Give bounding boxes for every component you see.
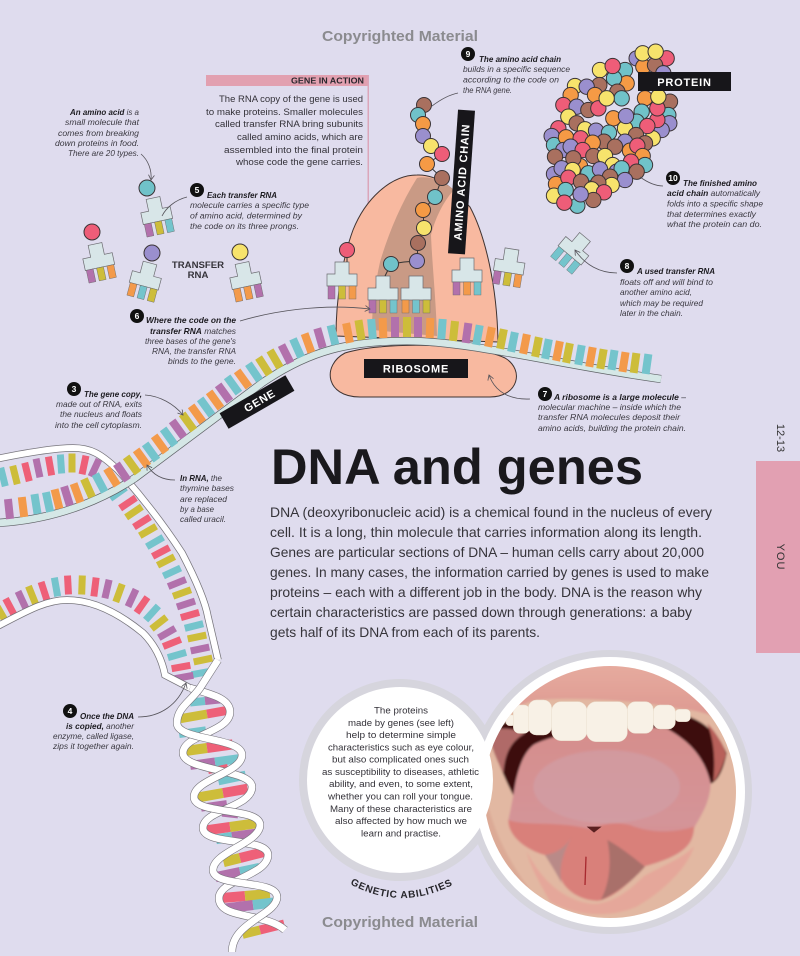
callout: uracil (147, 465, 234, 524)
callout: uracil: are replaced (180, 494, 227, 504)
gene in action panel (206, 75, 369, 232)
callout 10: finished chain: 10 (668, 173, 678, 183)
callout 7: ribosome: 7 (543, 389, 548, 399)
ribosome large subunit (336, 175, 498, 342)
callout 8: used transfer RNA: another amino acid, (620, 287, 692, 297)
genetic abilities body text: also affected by how much we (335, 816, 467, 827)
callout 3: gene copy: made out of RNA, exits (56, 399, 142, 409)
gene in action panel: whose code the gene carries. (235, 157, 363, 168)
callout 9: amino acid chain (432, 47, 570, 106)
callout: amino acid: An amino acid is a (69, 107, 139, 117)
ribosome small subunit (330, 345, 516, 397)
copyright bottom: Copyrighted Material (322, 914, 478, 931)
callout 4: ligase: Once the DNA (80, 711, 134, 721)
gene in action panel: GENE IN ACTION (291, 76, 364, 86)
callout 6: code matches: transfer RNA matches (150, 326, 236, 336)
callout 6: code matches: Where the code on the (146, 315, 236, 325)
genetic abilities body text: but also complicated ones such (332, 755, 469, 766)
intro body text: gets half of its DNA from each of its parents. (270, 625, 540, 640)
protein label (638, 72, 731, 91)
callout 6: code matches (130, 307, 370, 366)
callout 3: gene copy: into the cell cytoplasm. (55, 420, 142, 430)
callout 10: finished chain: The finished amino (683, 178, 757, 188)
side tab (756, 424, 800, 653)
copyright top: Copyrighted Material (322, 28, 478, 45)
callout 4: ligase: 4 (68, 706, 73, 716)
intro body text (270, 505, 712, 640)
genetic abilities body text: Many of these characteristics are (330, 804, 472, 815)
double helix (177, 660, 285, 952)
gene in action panel: called amino acids, which are (237, 132, 363, 143)
intro body text: certain characteristics are passed down through generations: a baby (270, 605, 692, 620)
genetic abilities body text: ability, and even, to some extent, (329, 779, 473, 790)
side tab: 12-13 (774, 424, 786, 452)
callout 8: used transfer RNA: later in the chain. (620, 308, 683, 318)
genetic abilities body text: as susceptibility to diseases, athletic (322, 767, 479, 778)
callout 9: amino acid chain: The amino acid chain (479, 54, 561, 64)
strand of DNA: lower ribbon and bases (0, 575, 194, 688)
intro body text: genes. In many cases, the information carried by genes is used to make (270, 565, 709, 580)
callout 3: gene copy: The gene copy, (84, 389, 142, 399)
gene in action panel: assembled into the final protein (224, 145, 363, 156)
callout 5: transfer RNA: the code on its three prongs. (190, 221, 299, 231)
amino acid chain label: AMINO ACID CHAIN (452, 123, 473, 241)
genetic abilities body text: help to determine simple (346, 730, 456, 741)
genetic abilities body text: The proteins (374, 706, 428, 716)
callout: uracil: called uracil. (180, 514, 226, 524)
callout 8: used transfer RNA: which may be required (620, 298, 703, 308)
callout 9: amino acid chain: 9 (466, 49, 471, 59)
callout 10: finished chain (640, 171, 763, 229)
callout 4: ligase: is copied, another (66, 721, 135, 731)
callout 6: code matches: three bases of the gene's (145, 336, 236, 346)
callout 8: used transfer RNA: A used transfer RNA (636, 266, 715, 276)
gene RNA strand with bases (0, 317, 661, 523)
gene label (220, 375, 294, 429)
free amino acids (84, 180, 248, 261)
protein cluster (544, 44, 678, 213)
callout 7: ribosome: amino acids, building the protein chain. (538, 423, 686, 433)
callout 4: ligase: zips it together again. (52, 741, 134, 751)
ribosome label (364, 359, 468, 378)
callout 4: ligase: enzyme, called ligase, (53, 731, 134, 741)
callout 3: gene copy (55, 382, 183, 430)
callout 5: transfer RNA: Each transfer RNA (207, 190, 277, 200)
callout 8: used transfer RNA: floats off and will bind to (620, 277, 713, 287)
callout 5: transfer RNA (162, 183, 309, 231)
genetic abilities body text: whether you can roll your tongue. (327, 792, 473, 802)
intro body text: Genes are particular sections of DNA – human cells carry about 20,000 (270, 545, 704, 560)
callout 4: ligase (52, 683, 186, 751)
grey ring behind text circle (299, 679, 501, 881)
callout: uracil: In RNA, the (180, 473, 222, 483)
gene in action panel: called transfer RNA bring subunits (215, 119, 363, 130)
callout 7: ribosome: molecular machine – inside which the (538, 402, 681, 412)
callout: uracil: by a base (180, 504, 214, 514)
gene in action panel: to make proteins. Smaller molecules (206, 107, 363, 118)
amino acid chain (340, 98, 450, 276)
callout: amino acid (55, 107, 151, 180)
callout 6: code matches: 6 (135, 311, 140, 321)
callout: uracil: thymine bases (180, 483, 234, 493)
callout 6: code matches: binds to the gene. (168, 356, 236, 366)
genetic abilities body text: learn and practise. (361, 828, 441, 839)
callout 6: code matches: RNA, the transfer RNA (152, 346, 236, 356)
callout 10: finished chain: folds into a specific shape (667, 198, 763, 208)
genetic abilities body text: made by genes (see left) (348, 718, 454, 729)
callout 10: finished chain: what the protein can do. (667, 219, 762, 229)
callout 10: finished chain: that determines exactly (667, 209, 757, 219)
title: DNA and genes (271, 439, 643, 495)
tongue rolling photo (468, 650, 757, 937)
callout 9: amino acid chain: the RNA gene. (463, 85, 512, 95)
gene in action panel: The RNA copy of the gene is used (219, 94, 363, 105)
callout 9: amino acid chain: according to the code on (463, 74, 559, 84)
protein label: PROTEIN (657, 77, 712, 89)
genetic abilities body text: characteristics such as eye colour, (328, 742, 474, 753)
callout: amino acid: small molecule that (65, 117, 140, 127)
callout: amino acid: There are 20 types. (68, 148, 139, 158)
callout 8: used transfer RNA (575, 250, 715, 318)
callout 5: transfer RNA: of amino acid, determined by (190, 210, 303, 220)
callout 3: gene copy: the nucleus and floats (60, 409, 142, 419)
amino acid chain label (448, 110, 475, 254)
callout 5: transfer RNA: 5 (195, 185, 200, 195)
genetic abilities text circle (307, 687, 493, 873)
callout 8: used transfer RNA: 8 (625, 261, 630, 271)
side tab: YOU (774, 544, 786, 570)
callout 7: ribosome: transfer RNA molecules deposit their (538, 412, 681, 422)
intro body text: DNA (deoxyribonucleic acid) is a chemical found in the nucleus of every (270, 505, 712, 520)
intro body text: proteins – each with a different job in the body. DNA is the reason why (270, 585, 702, 600)
callout 10: finished chain: acid chain automatically (667, 188, 761, 198)
callout 9: amino acid chain: builds in a specific sequence (463, 64, 570, 74)
strand of DNA: upper ribbon and bases (0, 448, 218, 678)
transfer RNA label: TRANSFER (172, 260, 224, 271)
callout 3: gene copy: 3 (72, 384, 77, 394)
ribosome label: RIBOSOME (383, 364, 449, 376)
callout: amino acid: comes from breaking (58, 128, 139, 138)
callout 5: transfer RNA: molecule carries a specific type (190, 200, 309, 210)
callout 7: ribosome (489, 375, 686, 433)
genetic abilities body text (322, 706, 479, 839)
transfer RNA molecules (80, 195, 596, 313)
genetic abilities curved heading: GENETIC ABILITIES (352, 879, 452, 898)
intro body text: cell. It is a long, thin molecule that carries information along its length. (270, 525, 702, 540)
gene label: GENE (242, 388, 278, 415)
callout: amino acid: down proteins in food. (55, 138, 139, 148)
callout 7: ribosome: A ribosome is a large molecule – (553, 392, 686, 402)
transfer RNA label: RNA (188, 270, 208, 281)
